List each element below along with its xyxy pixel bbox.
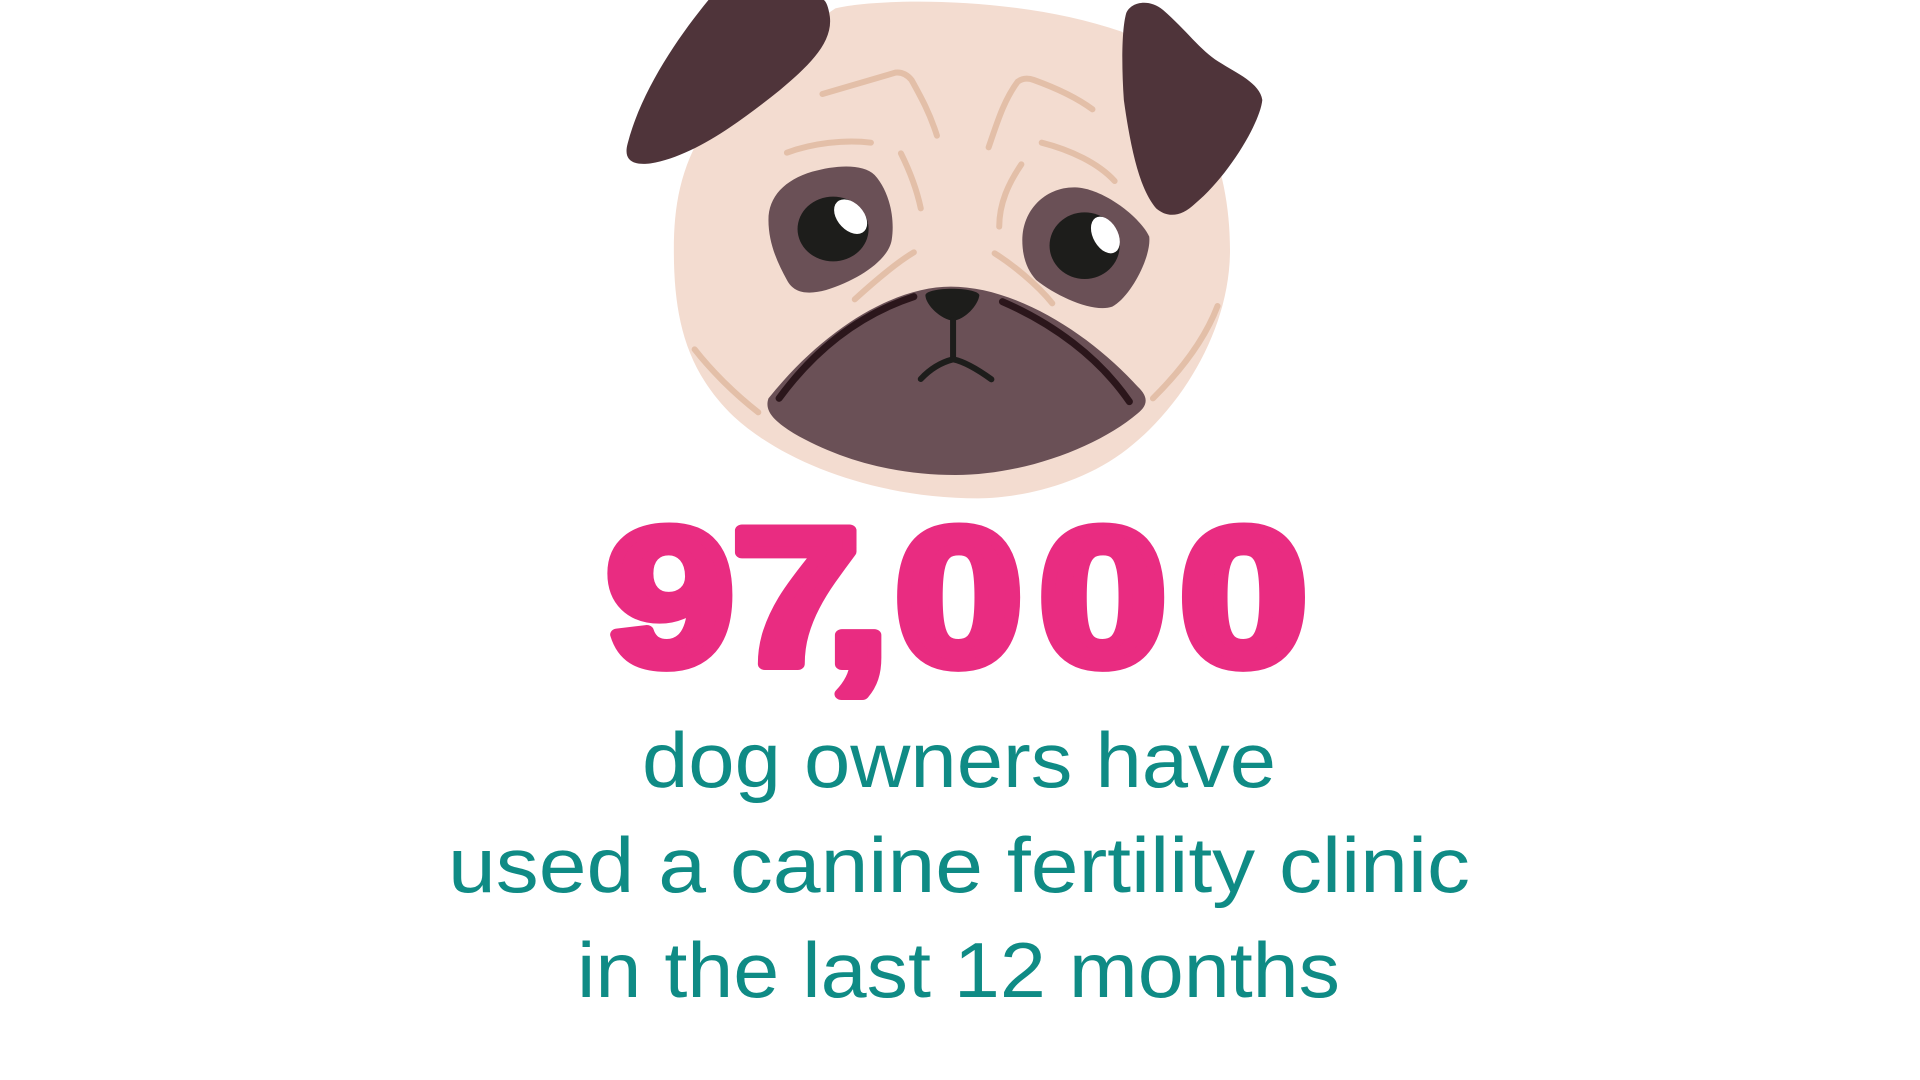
big number: 97,000 bbox=[607, 488, 1307, 705]
icon: sad pug face bbox=[627, 0, 1262, 498]
pug head bbox=[674, 2, 1230, 498]
right ear bbox=[1122, 3, 1262, 215]
caption line 1: dog owners have bbox=[642, 716, 1276, 804]
forehead and cheek wrinkles bbox=[695, 73, 1218, 412]
caption text bbox=[448, 716, 1470, 1014]
right eye bbox=[1022, 187, 1149, 308]
caption line 2: used a canine fertility clinic bbox=[448, 821, 1470, 909]
left ear bbox=[627, 0, 830, 164]
muzzle bbox=[767, 287, 1146, 475]
caption line 3: in the last 12 months bbox=[577, 926, 1340, 1014]
left eye bbox=[768, 166, 893, 293]
